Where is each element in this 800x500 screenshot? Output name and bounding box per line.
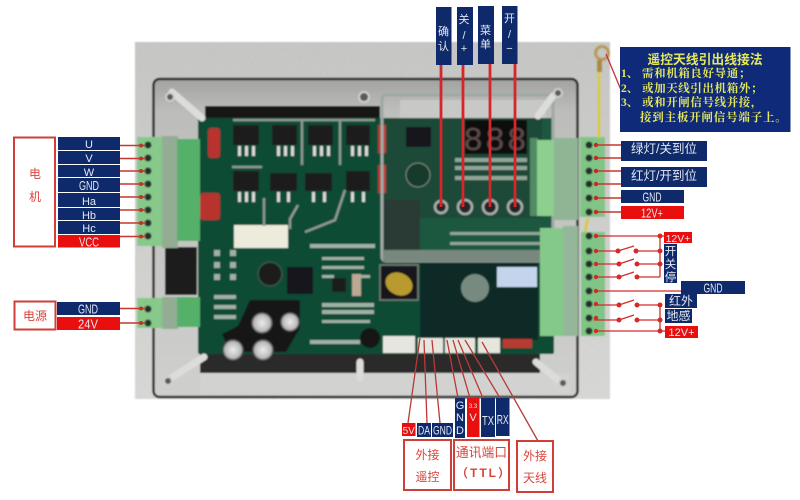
switch wires (594, 236, 681, 331)
key close plus (457, 7, 473, 65)
black terminal recess left (165, 247, 197, 295)
key confirm (436, 7, 452, 65)
antenna leader line (606, 54, 621, 90)
right lower terminal (540, 226, 605, 336)
motor title: 电 (29, 167, 41, 181)
panel: lower right switch wiring (594, 232, 745, 339)
12V label: 12V+ (641, 206, 663, 220)
label vertical GND: D (456, 425, 464, 437)
dark band above board (205, 106, 380, 120)
label U: U (85, 139, 93, 151)
communication port box: 通讯端口 (456, 445, 507, 460)
label RX (496, 398, 510, 436)
lower metal strip (200, 373, 570, 395)
top 12V label: 12V+ (666, 233, 690, 245)
external remote box: 遥控 (415, 470, 440, 484)
label vertical GND (455, 398, 465, 438)
cover highlight (400, 100, 546, 118)
crystal and controller chip (332, 274, 361, 296)
external antenna box: 外接 (523, 448, 547, 463)
note line 1: 需和机箱良好导通； (642, 66, 751, 80)
gold oval chip (380, 265, 418, 300)
label Hb: Hb (82, 210, 96, 222)
metal backing plate (135, 42, 610, 399)
key open minus: 开 (504, 13, 515, 25)
silver round component (461, 274, 489, 302)
communication port box (454, 440, 512, 490)
key menu: 单 (480, 38, 491, 51)
note line 1: 1、 (621, 68, 638, 80)
acrylic cover over display (382, 95, 553, 261)
terminal red dots (139, 144, 143, 238)
note line 3: 3、 (621, 97, 638, 109)
acrylic lower edge band (383, 250, 553, 262)
power wires (120, 308, 146, 323)
key open minus (502, 6, 518, 64)
panel: keypad labels (436, 6, 518, 207)
LED display: 888 (463, 123, 529, 160)
open close stop label (664, 244, 677, 284)
bottom white connectors (383, 336, 500, 353)
power terminal left (137, 297, 200, 329)
red fuse (503, 339, 532, 348)
controller board photo (135, 42, 610, 399)
motor wires (120, 146, 146, 236)
external remote box: 外接 (415, 447, 440, 462)
label Hc: Hc (82, 223, 96, 235)
dark connector shadow (382, 200, 420, 250)
grey trace outlines (232, 120, 375, 232)
key open minus: − (506, 43, 513, 55)
tactile buttons (435, 200, 522, 214)
label vertical GND: N (456, 412, 464, 424)
motor title second character: 机 (29, 190, 41, 204)
label Ha: Ha (82, 196, 97, 208)
regulator IC (287, 267, 313, 294)
label VCC: VCC (79, 234, 99, 250)
external remote box (404, 440, 451, 490)
motor title box (14, 138, 55, 246)
black IC under cover (406, 127, 431, 147)
power transistors (233, 125, 370, 191)
GND label: GND (704, 280, 722, 296)
power title: 电源 (23, 309, 47, 323)
panel: power connections (14, 302, 146, 332)
label GND: GND (78, 302, 98, 316)
panel: antenna wiring note (606, 47, 790, 132)
label DA: DA (418, 424, 430, 438)
key confirm: 确 (438, 25, 449, 38)
transistor leads (238, 146, 368, 202)
electrolytic capacitors (222, 300, 300, 361)
antenna ring lead (585, 46, 608, 232)
note background (620, 47, 790, 132)
white relay block (234, 225, 288, 248)
infrared label: 红外 (669, 293, 693, 308)
label GND: GND (79, 178, 99, 193)
key close plus: + (461, 43, 467, 55)
key menu: 菜 (480, 24, 491, 37)
bottom leader lines (408, 338, 538, 441)
external antenna box (517, 441, 553, 492)
open close stop label: 开 (665, 246, 676, 258)
label W: W (84, 167, 95, 179)
dark right board section (420, 262, 538, 340)
ground sensor label: 地感 (666, 308, 691, 323)
key open minus: / (508, 29, 512, 41)
label vertical GND: G (456, 400, 464, 412)
GND label: GND (642, 190, 662, 204)
dark round inductor (258, 262, 282, 286)
switch nodes (594, 234, 662, 334)
label RX: RX (497, 413, 509, 427)
key menu (478, 6, 494, 64)
note line 2: 或加天线引出机箱外； (642, 81, 763, 95)
note title: 遥控天线引出线接法 (647, 52, 763, 67)
terminal red dots (139, 306, 143, 325)
panel: upper right terminal labels (594, 141, 707, 220)
label 3.3V: 3.3 (469, 404, 478, 410)
label 24V: 24V (78, 316, 98, 332)
GND label (681, 280, 745, 296)
panel: bottom connector labels (402, 338, 553, 492)
key close plus: / (462, 30, 466, 42)
standoff bolts (168, 92, 563, 384)
dark band below board (200, 352, 540, 373)
label 3.3V: V (469, 412, 477, 424)
key close plus: 关 (458, 12, 470, 26)
small surface parts (214, 244, 375, 344)
resistor rows (450, 158, 540, 245)
bottom 12V label: 12V+ (668, 327, 694, 339)
label 3.3V (467, 398, 480, 437)
external antenna box: 天线 (523, 471, 547, 485)
note line 2: 2、 (621, 83, 638, 95)
open close stop label: 关 (665, 257, 677, 271)
label GND: GND (433, 424, 452, 438)
keypad leader lines (441, 64, 515, 207)
red light label: 红灯/开到位 (631, 168, 697, 183)
screw heads (164, 89, 567, 387)
buzzer (360, 328, 380, 348)
label TX: TX (482, 414, 494, 428)
label 5V: 5V (403, 426, 415, 437)
label V: V (85, 153, 93, 165)
note line 4: 接到主板开闸信号端子上。 (640, 110, 788, 124)
acrylic enclosure frame (154, 79, 578, 397)
white sticker (497, 267, 537, 287)
green light label: 绿灯/关到位 (631, 141, 697, 156)
dark display section (382, 118, 542, 218)
note line 3: 或和开闸信号线并接， (642, 95, 763, 109)
motor terminal left (137, 136, 200, 248)
upper right wires (594, 145, 621, 212)
key confirm: 认 (438, 40, 449, 53)
panel: motor connections (14, 137, 146, 250)
round component under cover (406, 163, 430, 187)
red capacitors (200, 125, 386, 220)
printed circuit board (198, 118, 554, 354)
right upper terminal (530, 137, 605, 220)
terminal red dots (594, 143, 598, 214)
label TX (481, 398, 495, 437)
communication port box: （TTL） (456, 466, 512, 480)
open close stop label: 停 (665, 270, 676, 284)
power title box (14, 302, 56, 330)
